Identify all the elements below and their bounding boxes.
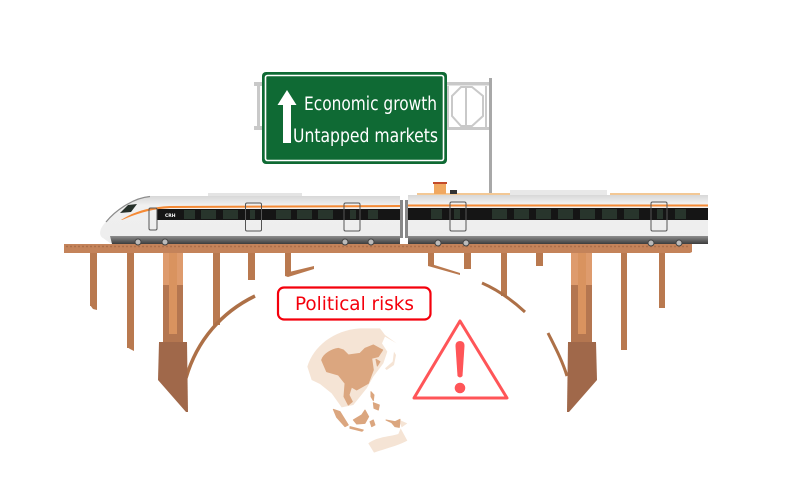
- highway sign: [254, 72, 492, 193]
- bridge arch left: [186, 296, 255, 378]
- bridge columns right: [428, 252, 665, 350]
- sign text: Economic growth: [304, 94, 437, 115]
- political risks label: Political risks: [295, 293, 414, 315]
- windows: [184, 210, 378, 219]
- bogies: [435, 240, 682, 246]
- arrow icon: [278, 90, 296, 143]
- logo: CRH: [165, 213, 176, 219]
- bridge deck: [64, 244, 692, 253]
- second car: [408, 182, 708, 246]
- bogies: [135, 239, 374, 245]
- sign post and truss: [254, 78, 492, 193]
- pantograph: [433, 182, 457, 194]
- light land: [307, 328, 407, 453]
- bridge arch right: [482, 283, 567, 376]
- bridge columns left: [90, 252, 314, 351]
- highway sign: Untapped markets: [293, 126, 438, 147]
- doors: [450, 202, 667, 231]
- bridge: [64, 244, 692, 412]
- dark land: [322, 345, 400, 431]
- main pier right: [567, 252, 597, 412]
- coupling: [400, 200, 408, 238]
- globe map: [307, 328, 407, 453]
- lead car: [100, 193, 400, 245]
- sign board: [262, 72, 447, 164]
- doors: [149, 203, 360, 231]
- windows: [431, 209, 686, 219]
- icon: warning triangle: [414, 321, 507, 398]
- train: [100, 182, 708, 246]
- main pier left: [158, 252, 188, 412]
- political risks label: [278, 288, 430, 320]
